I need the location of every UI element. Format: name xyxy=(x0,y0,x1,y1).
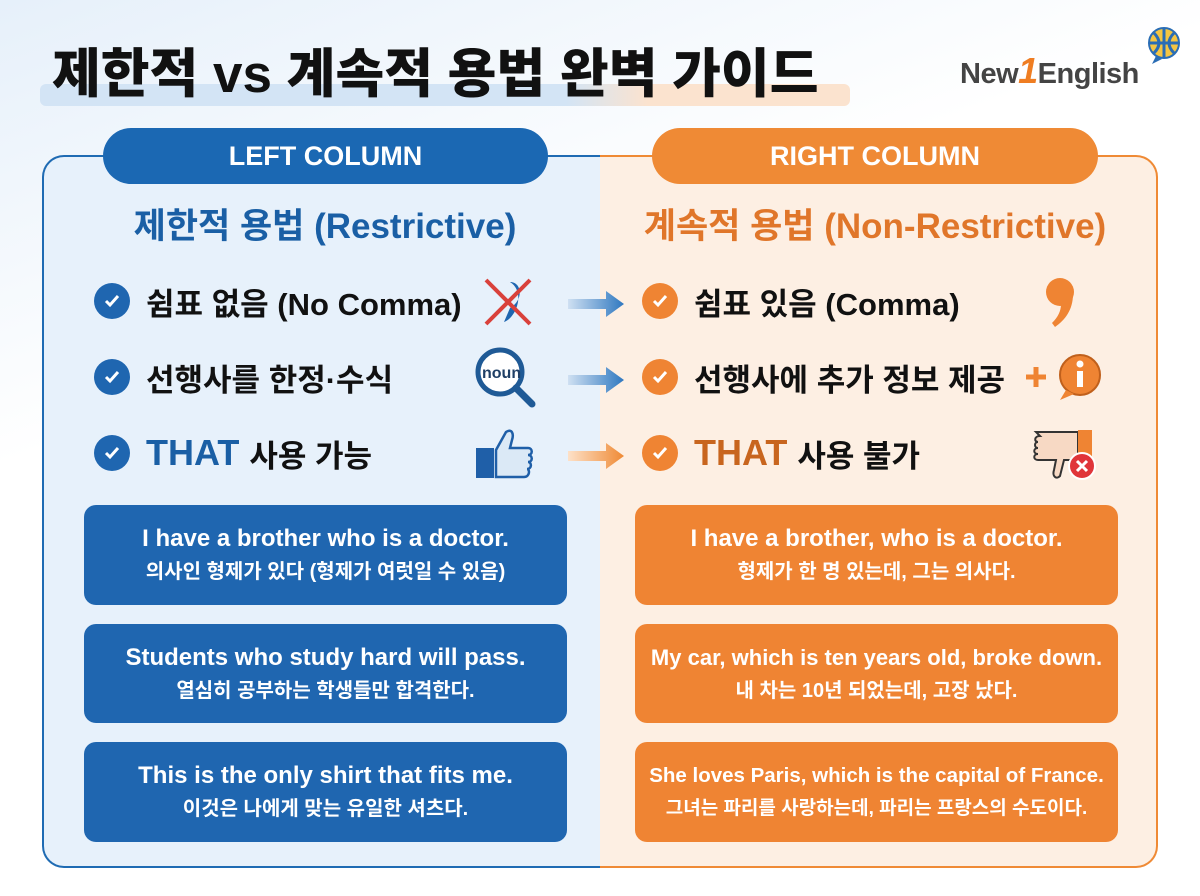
example box left 1: I have a brother who is a doctor. xyxy=(142,525,509,552)
left feature rows xyxy=(94,283,462,474)
icon: thumbs down xyxy=(1033,430,1096,480)
row: that no: THAT xyxy=(694,432,787,473)
panel: left column xyxy=(42,155,602,868)
row: comma: 쉼표 있음 (Comma) xyxy=(694,286,960,322)
example box left 2: 열심히 공부하는 학생들만 합격한다. xyxy=(176,680,475,702)
example box left 1: 의사인 형제가 있다 (형제가 여럿일 수 있음) xyxy=(146,561,505,583)
example box right 1: I have a brother, who is a doctor. xyxy=(690,525,1063,552)
row: that ok: THAT xyxy=(146,432,239,473)
example box left 3 xyxy=(84,742,567,842)
icon: crossed comma xyxy=(484,278,532,326)
icon: noun magnifier: noun xyxy=(482,365,521,382)
row: restrict: 선행사를 한정·수식 xyxy=(146,362,393,398)
header: right column xyxy=(652,128,1098,184)
right feature rows xyxy=(642,283,1005,474)
row: that no xyxy=(642,432,920,474)
row: that no: 사용 불가 xyxy=(797,438,920,474)
icon: plus info xyxy=(1026,354,1101,400)
example box right 3: She loves Paris, which is the capital of France. xyxy=(649,764,1104,787)
icon: globe xyxy=(1148,27,1180,64)
title highlight xyxy=(40,84,850,106)
example box right 1 xyxy=(635,505,1118,605)
logo: New1English xyxy=(960,50,1139,91)
example box right 2: My car, which is ten years old, broke down. xyxy=(651,644,1102,670)
header: right column: RIGHT COLUMN xyxy=(770,141,980,171)
logo xyxy=(960,27,1180,91)
example box left 3: 이것은 나에게 맞는 유일한 셔츠다. xyxy=(183,798,468,820)
example box right 3 xyxy=(635,742,1118,842)
subtitle left: 제한적 용법 (Restrictive) xyxy=(134,207,516,246)
example box left 1 xyxy=(84,505,567,605)
example box left 2 xyxy=(84,624,567,723)
example box right 1: 형제가 한 명 있는데, 그는 의사다. xyxy=(737,561,1016,583)
example box right 2 xyxy=(635,624,1118,723)
row: extra info: 선행사에 추가 정보 제공 xyxy=(694,362,1005,398)
icon: thumbs up xyxy=(476,430,533,478)
arrows xyxy=(568,291,624,469)
row: no comma: 쉼표 없음 (No Comma) xyxy=(146,286,462,322)
icon: noun magnifier xyxy=(476,348,536,408)
example box left 2: Students who study hard will pass. xyxy=(125,644,526,670)
example box right 3: 그녀는 파리를 사랑하는데, 파리는 프랑스의 수도이다. xyxy=(666,798,1087,819)
panel: right column xyxy=(600,155,1158,868)
title: 제한적 vs 계속적 용법 완벽 가이드 xyxy=(52,45,818,104)
header: left column: LEFT COLUMN xyxy=(229,141,422,171)
header: left column xyxy=(103,128,548,184)
icon: comma xyxy=(1046,278,1074,327)
subtitle right: 계속적 용법 (Non-Restrictive) xyxy=(644,207,1106,246)
example box right 2: 내 차는 10년 되었는데, 고장 났다. xyxy=(736,680,1017,702)
example box left 3: This is the only shirt that fits me. xyxy=(138,762,513,789)
row: that ok: 사용 가능 xyxy=(249,438,372,474)
row: that ok xyxy=(94,432,372,474)
